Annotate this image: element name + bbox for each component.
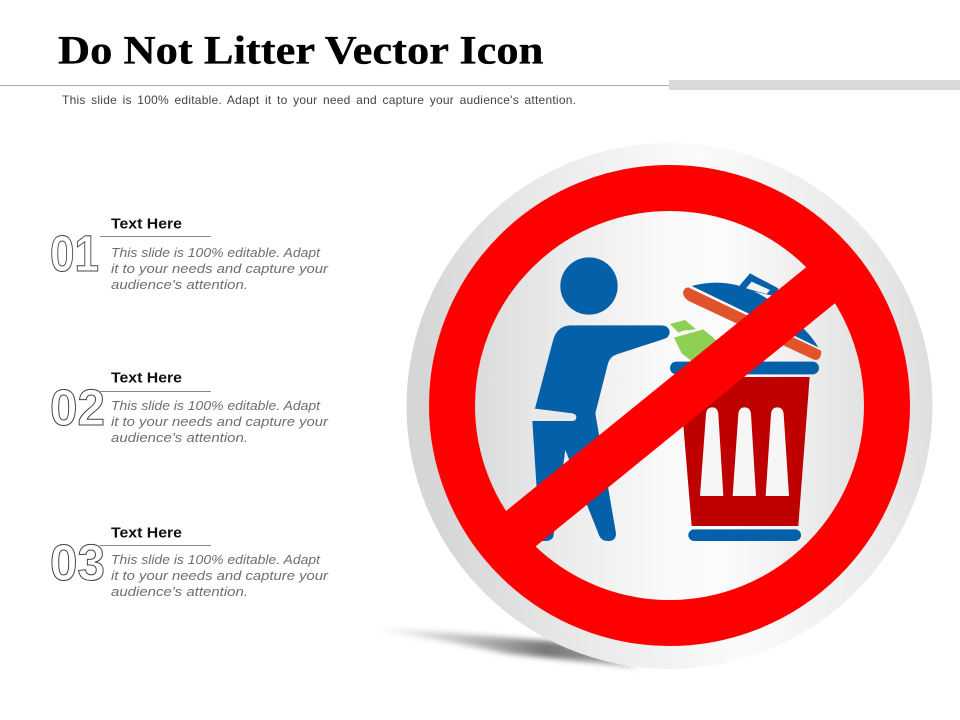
lid handle — [740, 273, 778, 297]
heading 01: Text Here — [111, 216, 182, 232]
item 01 — [50, 216, 329, 292]
description 01: it to your needs and capture your — [111, 261, 329, 276]
description 03: it to your needs and capture your — [111, 568, 329, 583]
red prohibition ring — [452, 188, 887, 623]
item 02 — [50, 370, 329, 445]
icon: person and trash can — [529, 257, 821, 541]
description 02 — [111, 398, 329, 445]
description 03: audience's attention. — [111, 584, 248, 599]
subtitle: This slide is 100% editable. Adapt it to your need and capture your audience's attention. — [62, 93, 576, 107]
heading 03: Text Here — [111, 524, 182, 542]
description 02: it to your needs and capture your — [111, 414, 329, 429]
sign inner face — [470, 206, 870, 606]
description 02: This slide is 100% editable. Adapt — [111, 398, 321, 413]
item 03 — [50, 524, 329, 599]
description 03 — [111, 552, 329, 599]
lid dome — [692, 283, 818, 347]
no-littering sign — [406, 143, 932, 669]
bin slots — [700, 407, 789, 496]
paper scraps — [670, 320, 720, 365]
title: Do Not Litter Vector Icon — [58, 28, 543, 73]
description 01: This slide is 100% editable. Adapt — [111, 245, 321, 260]
head — [560, 257, 618, 315]
description 01: audience's attention. — [111, 277, 248, 292]
heading 02: Text Here — [111, 370, 182, 386]
lid bar — [683, 287, 821, 360]
header rule — [0, 80, 960, 90]
bin body — [679, 377, 810, 526]
waist gap — [529, 409, 576, 421]
description 01 — [111, 245, 329, 292]
sign outer silver disc — [406, 143, 932, 669]
person body — [532, 325, 670, 541]
red diagonal bar — [490, 256, 850, 555]
number 02: 02 — [50, 379, 105, 436]
description 03: This slide is 100% editable. Adapt — [111, 552, 321, 567]
number 01: 01 — [50, 225, 99, 282]
description 02: audience's attention. — [111, 430, 248, 445]
sign shadow — [370, 628, 640, 668]
bin rim — [670, 362, 819, 374]
bin base — [688, 529, 801, 541]
number 03: 03 — [50, 534, 105, 591]
